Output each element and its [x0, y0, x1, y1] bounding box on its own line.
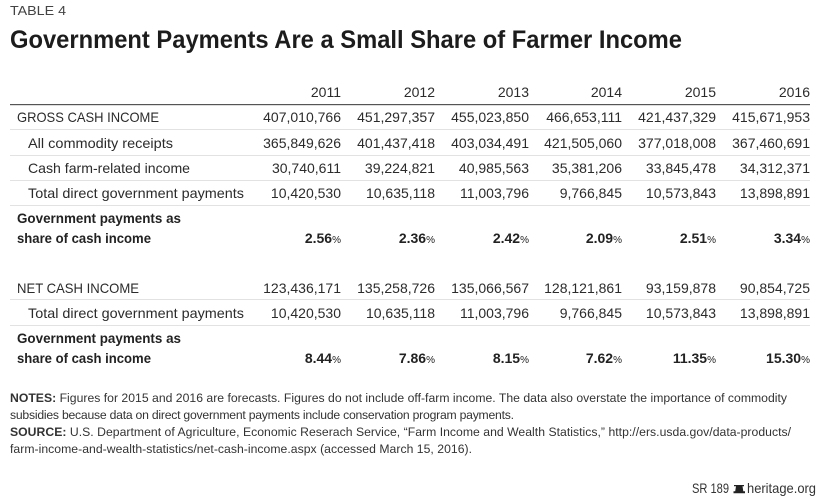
row: government share of net cash income: share of cash income	[17, 350, 151, 366]
notes and source: SOURCE: U.S. Department of Agriculture, Economic Reserach Service, “Farm Income and Wealth Statistics,” http://ers.usda.gov/data-products/	[10, 425, 792, 439]
row: government share of gross cash income: 2.09%	[586, 230, 622, 246]
row: all commodity receipts: 421,505,060	[544, 135, 622, 151]
year header row: 2013	[498, 84, 529, 100]
row: total direct government payments (net): Total direct government payments	[28, 305, 244, 321]
row: net cash income: 135,066,567	[451, 280, 529, 296]
row: government share of net cash income: 8.44%	[305, 350, 341, 366]
row: government share of net cash income: Government payments as	[17, 330, 181, 346]
notes and source: NOTES: Figures for 2015 and 2016 are forecasts. Figures do not include off-farm income. The data also overstate the importance of commodity	[10, 391, 788, 405]
footer credit: heritage.org	[747, 480, 816, 496]
row: cash farm-related income: 34,312,371	[740, 160, 810, 176]
row: government share of net cash income: 8.15%	[493, 350, 529, 366]
row: all commodity receipts: 401,437,418	[357, 135, 435, 151]
year header row: 2015	[685, 84, 716, 100]
row: total direct government payments: 9,766,845	[560, 185, 622, 201]
year header row: 2011	[311, 84, 341, 100]
row: gross cash income: 407,010,766	[263, 109, 341, 125]
row: all commodity receipts	[28, 135, 810, 151]
row: government share of gross cash income: 2.42%	[493, 230, 529, 246]
table rules	[10, 104, 810, 326]
row: total direct government payments	[28, 185, 810, 201]
row: net cash income: 135,258,726	[357, 280, 435, 296]
row: net cash income: 128,121,861	[544, 280, 622, 296]
year header row: 2014	[591, 84, 622, 100]
row: government share of gross cash income: 2.36%	[399, 230, 435, 246]
row: total direct government payments (net)	[28, 305, 810, 321]
row: net cash income: 90,854,725	[740, 280, 810, 296]
data table	[10, 84, 810, 366]
row: cash farm-related income: 39,224,821	[365, 160, 435, 176]
row: gross cash income: GROSS CASH INCOME	[17, 109, 159, 125]
row: total direct government payments (net): 13,898,891	[740, 305, 810, 321]
row: government share of gross cash income: share of cash income	[17, 230, 151, 246]
row: government share of gross cash income: 2.56%	[305, 230, 341, 246]
row: all commodity receipts: 377,018,008	[638, 135, 716, 151]
row: gross cash income: 466,653,111	[546, 109, 622, 125]
row: net cash income: NET CASH INCOME	[17, 280, 139, 296]
row: total direct government payments (net): 10,635,118	[366, 305, 435, 321]
row: total direct government payments: Total direct government payments	[28, 185, 244, 201]
row: total direct government payments (net): 10,420,530	[271, 305, 341, 321]
row: total direct government payments: 10,635,118	[366, 185, 435, 201]
row: government share of net cash income	[17, 330, 810, 366]
year header row: 2012	[404, 84, 435, 100]
row: cash farm-related income: Cash farm-related income	[28, 160, 190, 176]
year header row	[311, 84, 810, 100]
footer credit: SR 189	[692, 480, 729, 496]
row: government share of net cash income: 15.30%	[766, 350, 810, 366]
row: gross cash income: 451,297,357	[357, 109, 435, 125]
year header row: 2016	[779, 84, 810, 100]
row: government share of net cash income: 7.86%	[399, 350, 435, 366]
row: gross cash income: 455,023,850	[451, 109, 529, 125]
row: cash farm-related income	[28, 160, 810, 176]
row: net cash income: 123,436,171	[263, 280, 341, 296]
row: government share of gross cash income	[17, 210, 810, 246]
row: all commodity receipts: 403,034,491	[451, 135, 529, 151]
row: total direct government payments: 13,898,891	[740, 185, 810, 201]
icon: liberty bell	[734, 485, 745, 493]
title: Government Payments Are a Small Share of Farmer Income	[10, 26, 682, 54]
row: government share of gross cash income: 2.51%	[680, 230, 716, 246]
row: net cash income	[17, 280, 810, 296]
row: cash farm-related income: 35,381,206	[552, 160, 622, 176]
footer credit	[692, 480, 816, 496]
row: total direct government payments: 10,420,530	[271, 185, 341, 201]
row: total direct government payments: 10,573,843	[646, 185, 716, 201]
row: government share of gross cash income: Government payments as	[17, 210, 181, 226]
row: cash farm-related income: 30,740,611	[272, 160, 341, 176]
notes and source: subsidies because data on direct government payments include conservation program payments.	[10, 408, 514, 422]
row: all commodity receipts: 365,849,626	[263, 135, 341, 151]
row: gross cash income: 421,437,329	[638, 109, 716, 125]
row: net cash income: 93,159,878	[646, 280, 716, 296]
row: all commodity receipts: All commodity receipts	[28, 135, 173, 151]
row: total direct government payments (net): 9,766,845	[560, 305, 622, 321]
notes and source	[10, 391, 792, 456]
row: cash farm-related income: 40,985,563	[459, 160, 529, 176]
row: total direct government payments (net): 10,573,843	[646, 305, 716, 321]
row: gross cash income	[17, 109, 810, 125]
table label: TABLE 4	[10, 3, 66, 18]
row: total direct government payments (net): 11,003,796	[460, 305, 529, 321]
row: government share of net cash income: 7.62%	[586, 350, 622, 366]
row: cash farm-related income: 33,845,478	[646, 160, 716, 176]
row: gross cash income: 415,671,953	[732, 109, 810, 125]
row: government share of gross cash income: 3.34%	[774, 230, 810, 246]
notes and source: farm-income-and-wealth-statistics/net-cash-income.aspx (accessed March 15, 2016).	[10, 442, 472, 456]
row: total direct government payments: 11,003,796	[460, 185, 529, 201]
row: all commodity receipts: 367,460,691	[732, 135, 810, 151]
row: government share of net cash income: 11.35%	[673, 350, 716, 366]
